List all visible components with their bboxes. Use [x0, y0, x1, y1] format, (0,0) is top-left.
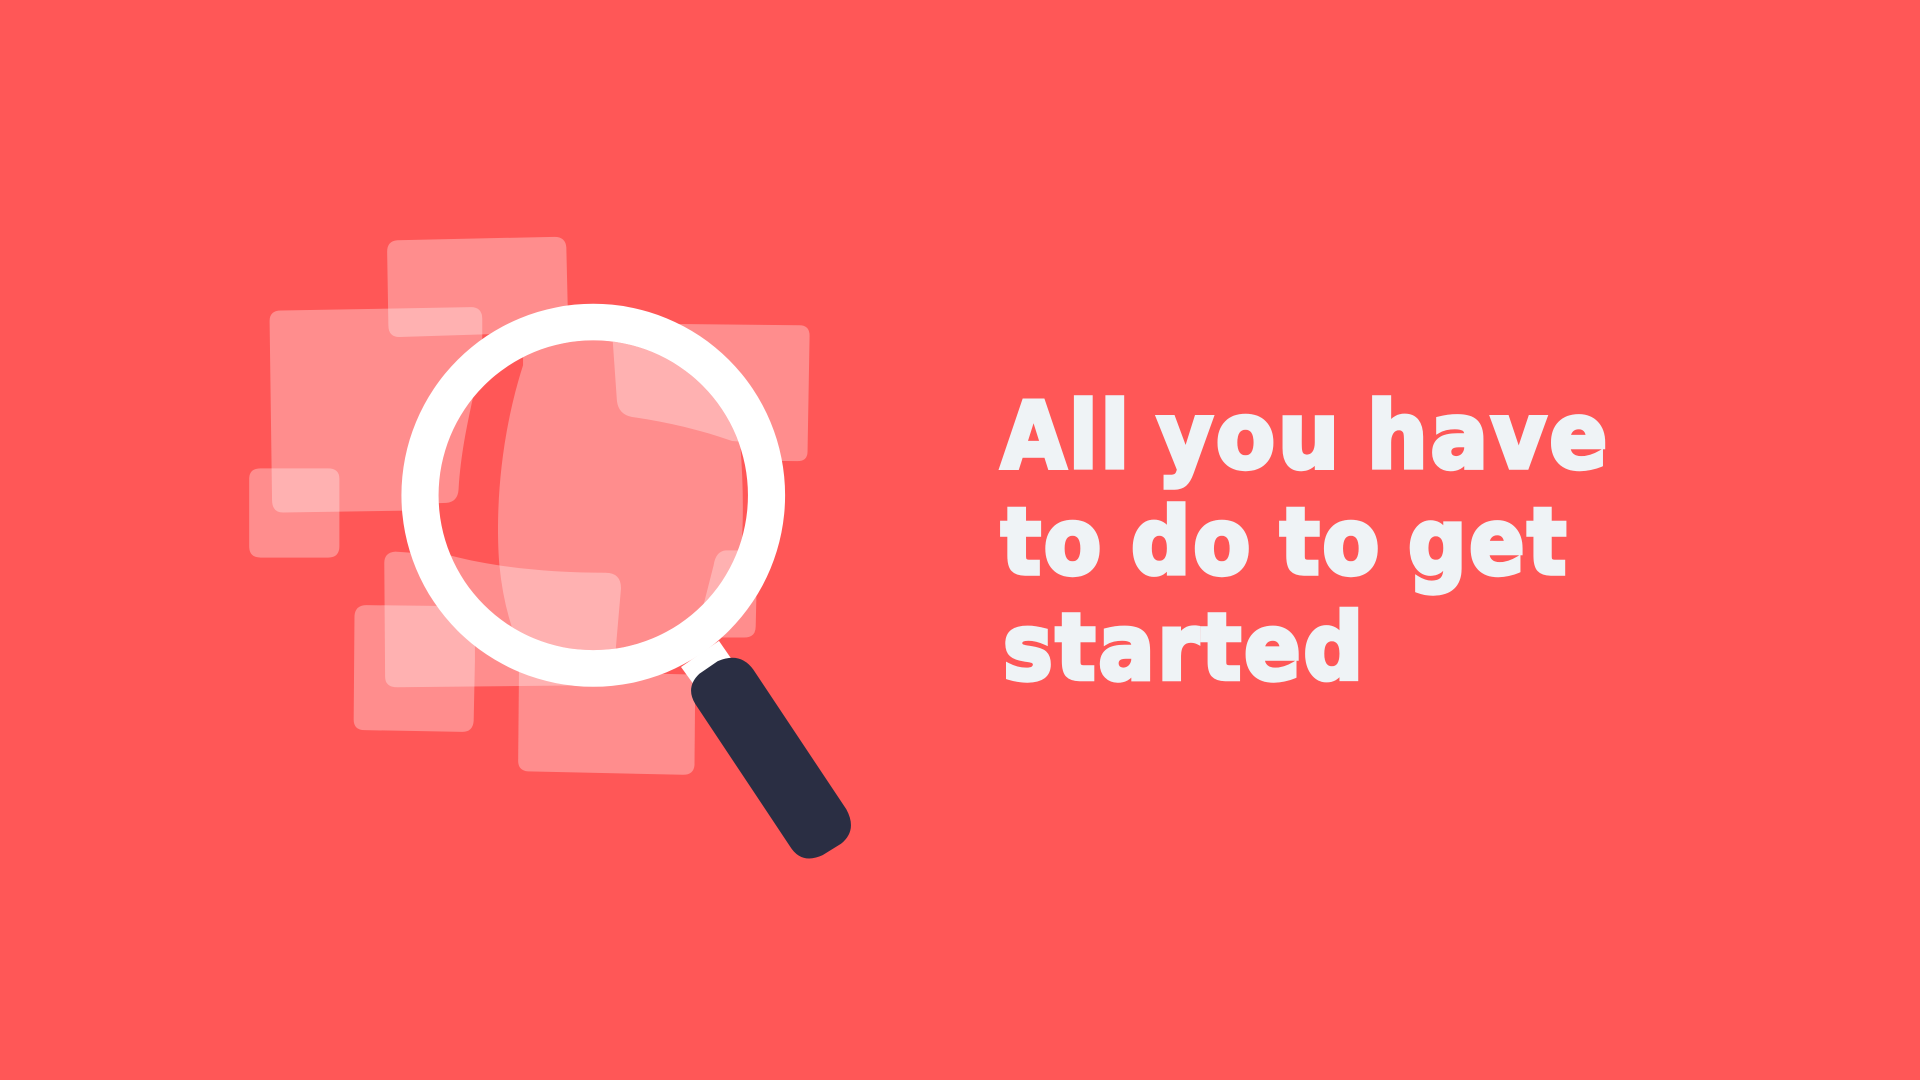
- heading: All: [1001, 382, 1132, 490]
- infographic canvas: [249, 236, 1606, 858]
- heading: do: [1131, 488, 1253, 596]
- magnifier handle: [691, 658, 851, 858]
- illustration: magnifying glass over documents: [249, 237, 851, 858]
- magnified sheets seen through the lens: [498, 340, 743, 650]
- heading: to: [1280, 488, 1382, 596]
- magnifier neck: [681, 641, 731, 684]
- sheet: lower left: [354, 605, 475, 732]
- magnified centre sheet: [498, 340, 743, 650]
- heading: to: [1001, 488, 1104, 596]
- magnifier ring: [401, 304, 785, 687]
- sheet: lower middle: [384, 552, 621, 687]
- sheet: top: [387, 237, 568, 337]
- heading: get: [1408, 488, 1569, 596]
- sheet: small left: [249, 468, 339, 558]
- sheet: top right: [675, 324, 810, 461]
- heading: [1001, 382, 1610, 701]
- heading: have: [1367, 382, 1610, 490]
- sheet: bottom: [518, 670, 695, 775]
- documents: translucent scattered sheets: [249, 237, 810, 775]
- heading: you: [1157, 382, 1342, 490]
- sheet: large left: [270, 307, 482, 513]
- sheet: small right: [703, 550, 757, 638]
- heading: started: [1003, 594, 1366, 701]
- magnified top-right sheet: [612, 342, 738, 442]
